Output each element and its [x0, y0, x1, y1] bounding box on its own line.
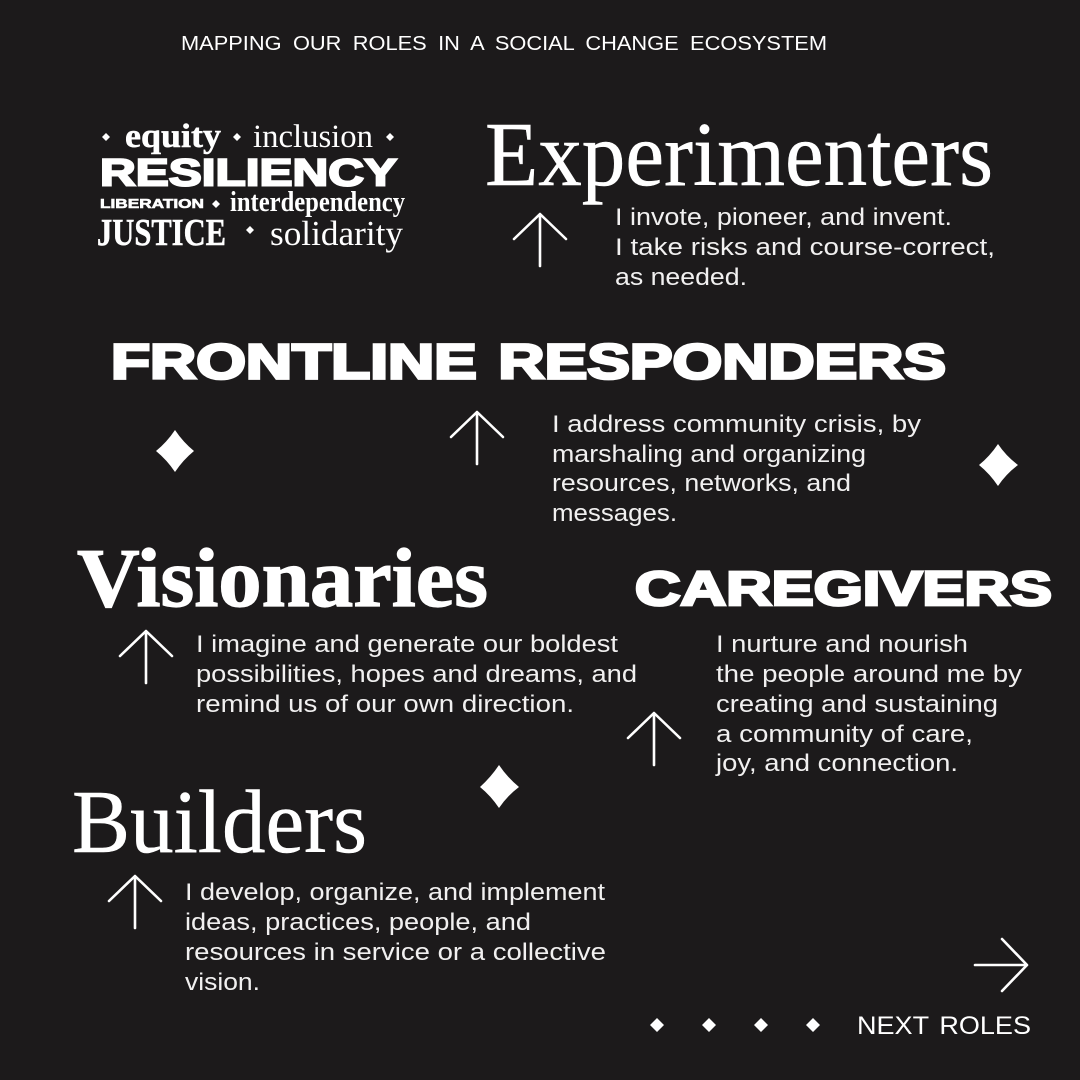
- heading: Frontline Responders: FRONTLINE RESPONDERS: [111, 336, 946, 390]
- text: Builders description: ideas, practices, people, and: [185, 909, 531, 936]
- text: Experimenters description: as needed.: [615, 264, 747, 291]
- text: Builders description: I develop, organize, and implement: [185, 879, 605, 906]
- text: Frontline Responders description: [552, 411, 922, 527]
- text: Visionaries description: I imagine and generate our boldest: [196, 631, 618, 658]
- icon: Experimenters up arrow: [514, 214, 566, 266]
- text: Experimenters description: I take risks and course-correct,: [615, 234, 995, 261]
- text: Caregivers description: joy, and connection.: [715, 750, 958, 777]
- icon: pagination diamonds: [650, 1018, 820, 1032]
- icon: Builders up arrow: [109, 876, 161, 928]
- heading: Builders: Builders: [72, 773, 367, 872]
- text: Caregivers description: creating and sustaining: [716, 691, 998, 718]
- icon: Caregivers up arrow: [628, 713, 680, 765]
- label: next roles: NEXT ROLES: [857, 1012, 1031, 1040]
- text: Experimenters description: I invote, pioneer, and invent.: [615, 204, 952, 231]
- text: Frontline Responders description: marshaling and organizing: [552, 441, 866, 468]
- text: Frontline Responders description: messages.: [552, 500, 677, 527]
- text: Caregivers description: I nurture and nourish: [716, 631, 968, 658]
- word cloud of values: equity: [125, 118, 221, 155]
- text: Caregivers description: a community of care,: [716, 721, 973, 748]
- text: Visionaries description: possibilities, hopes and dreams, and: [196, 661, 637, 688]
- text: Builders description: [185, 879, 606, 996]
- title: MAPPING OUR ROLES IN A SOCIAL CHANGE ECOSYSTEM: [181, 32, 827, 55]
- word cloud of values: JUSTICE: [97, 212, 226, 254]
- text: Visionaries description: remind us of our own direction.: [196, 691, 574, 718]
- heading: Experimenters: Experimenters: [485, 104, 993, 205]
- text: Frontline Responders description: resources, networks, and: [552, 470, 851, 497]
- word cloud of values: inclusion: [253, 119, 373, 155]
- icon: next arrow: [975, 939, 1027, 991]
- heading: Visionaries: Visionaries: [77, 532, 488, 625]
- text: Caregivers description: [715, 631, 1023, 777]
- word cloud of values: LIBERATION: [100, 196, 204, 211]
- icon: Visionaries up arrow: [120, 631, 172, 683]
- text: Visionaries description: [196, 631, 637, 718]
- icon: large diamond centre: [480, 765, 519, 808]
- text: Builders description: resources in service or a collective: [185, 939, 606, 966]
- icon: Frontline Responders up arrow: [451, 412, 503, 464]
- word cloud of values: RESILIENCY: [100, 152, 397, 194]
- icon: large diamond left: [156, 430, 194, 472]
- word cloud of values: [97, 118, 405, 254]
- text: Experimenters description: [615, 204, 995, 291]
- text: Frontline Responders description: I address community crisis, by: [552, 411, 922, 438]
- text: Caregivers description: the people around me by: [716, 661, 1023, 688]
- icon: large diamond right: [979, 444, 1018, 486]
- heading: Caregivers: CAREGIVERS: [635, 563, 1052, 616]
- word cloud of values: solidarity: [270, 214, 403, 253]
- text: Builders description: vision.: [185, 969, 260, 996]
- word cloud of values: interdependency: [230, 186, 405, 218]
